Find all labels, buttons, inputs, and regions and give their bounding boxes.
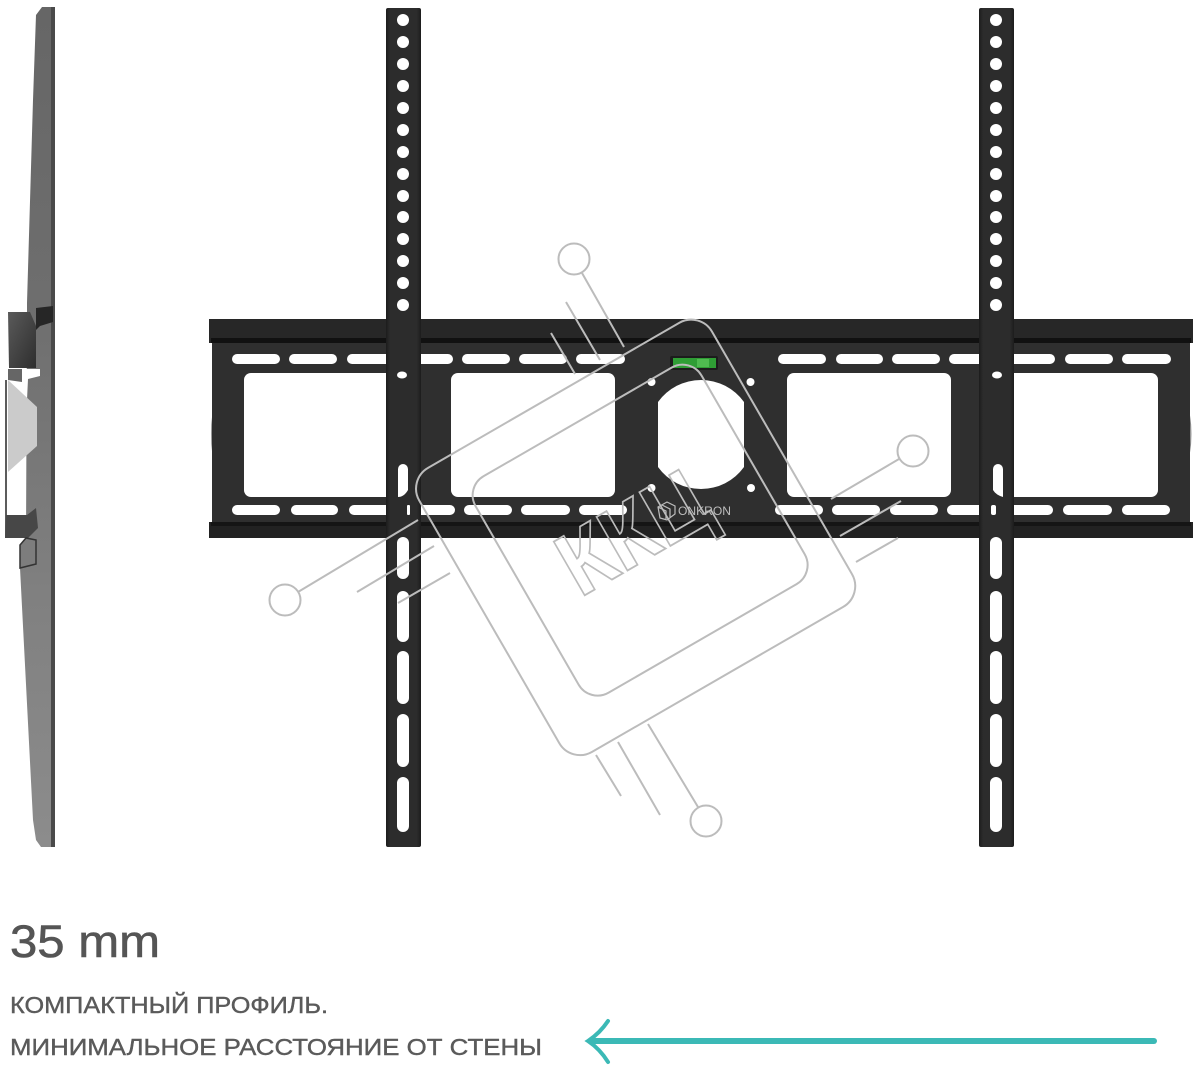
upper clamp	[8, 312, 36, 368]
round holes	[990, 14, 1002, 311]
profile body	[20, 7, 55, 847]
bottom slots	[232, 505, 1170, 515]
light plate	[8, 380, 37, 472]
bottom flange	[209, 522, 1193, 538]
brand logo	[658, 502, 731, 520]
gap below plate	[8, 458, 25, 515]
icon: brand mark	[658, 502, 675, 520]
description line 1: КОМПАКТНЫЙ ПРОФИЛЬ.	[10, 991, 328, 1018]
top slots	[232, 354, 1171, 364]
side profile of the bracket	[5, 7, 55, 847]
dimension value: 35 mm	[10, 916, 160, 967]
center opening	[658, 380, 744, 489]
large windows	[244, 373, 1158, 497]
side tab left	[211, 395, 216, 473]
arrow pointing to wall	[588, 1021, 1154, 1062]
round holes	[397, 14, 409, 311]
left vertical strip	[386, 8, 421, 847]
seller watermark	[270, 244, 928, 836]
horizontal wall plate	[209, 319, 1193, 538]
watermark letters: ККЦ	[540, 450, 727, 615]
lower clamp	[5, 508, 38, 538]
side tab right	[1185, 395, 1192, 473]
lower hook	[20, 538, 36, 568]
long slots	[397, 372, 410, 832]
right vertical strip	[979, 8, 1014, 847]
brand name: ONKRON	[678, 506, 731, 518]
long slots	[990, 372, 1003, 832]
notch	[22, 369, 40, 400]
bubble level	[670, 356, 718, 370]
top flange	[209, 319, 1193, 343]
VESA screw holes	[648, 378, 755, 492]
description line 2: МИНИМАЛЬНОЕ РАССТОЯНИЕ ОТ СТЕНЫ	[10, 1034, 542, 1060]
